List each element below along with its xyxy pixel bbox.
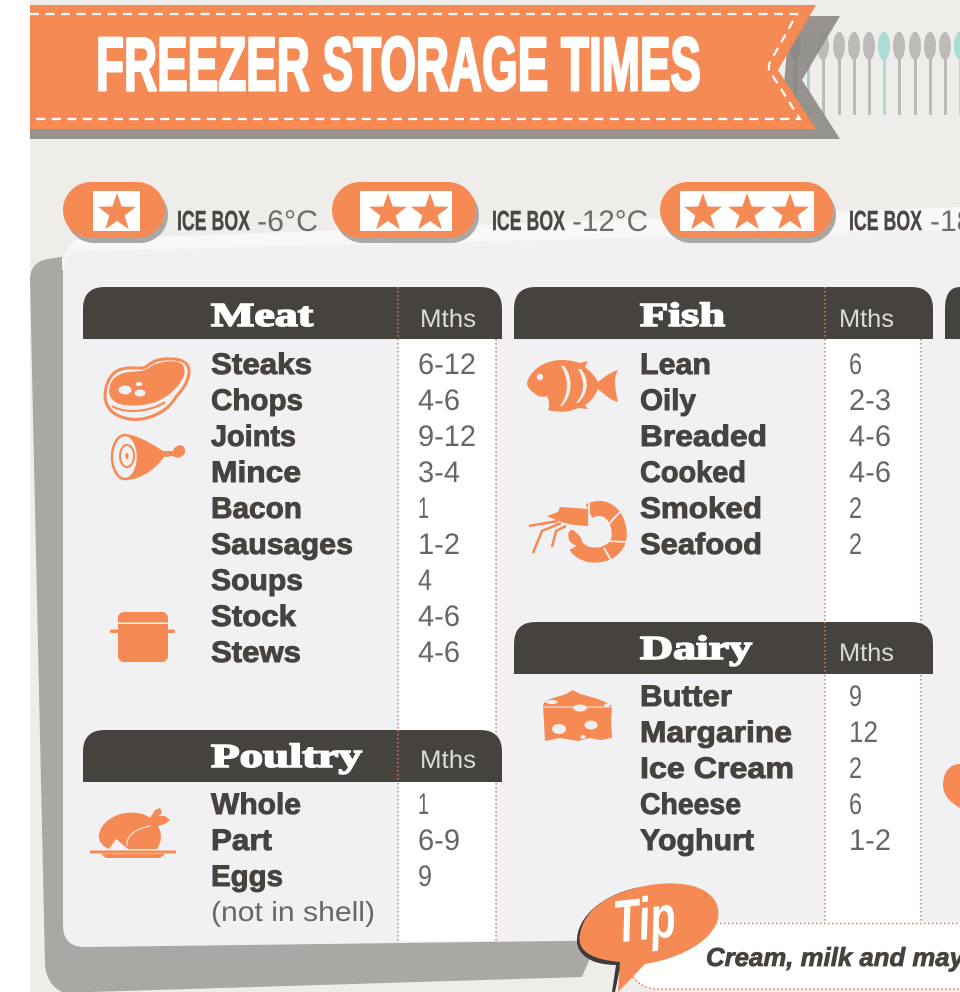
title banner (30, 5, 840, 139)
icon: pot (110, 612, 175, 662)
poultry header: Poultry (211, 738, 362, 775)
panel: meat (83, 287, 502, 669)
meat items: Stews (211, 636, 301, 669)
fish months: 2 (849, 492, 862, 525)
dairy header: Dairy (640, 630, 752, 667)
meat items: Steaks (211, 348, 312, 381)
dairy items: Margarine (640, 716, 792, 749)
fish months (849, 348, 891, 561)
poultry items: (not in shell) (211, 896, 375, 927)
poultry header: Mths (420, 746, 476, 774)
dairy months: 6 (849, 788, 862, 821)
panel: fish (514, 287, 933, 562)
poultry items: Part (211, 824, 272, 857)
panel: poultry (83, 730, 502, 927)
legend label: ICE BOX (492, 205, 565, 236)
fish header: Mths (839, 305, 894, 333)
icon: shrimp (529, 503, 628, 562)
fish items (640, 348, 767, 561)
tip text: Cream, milk and may (706, 942, 960, 972)
panel: fish and dairy month column (825, 339, 921, 924)
meat months: 4-6 (418, 384, 460, 417)
fish items: Smoked (640, 492, 762, 525)
dairy months: 1-2 (849, 824, 891, 857)
meat months: 6-12 (418, 348, 476, 381)
meat months: 1 (418, 492, 429, 525)
meat months: 4-6 (418, 600, 460, 633)
meat months: 1-2 (418, 528, 460, 561)
fish header: Fish (640, 297, 725, 334)
temperature: -12°C (572, 205, 648, 238)
fish items: Lean (640, 348, 711, 381)
meat items: Mince (211, 456, 301, 489)
meat months: 9-12 (418, 420, 476, 453)
poultry months: 1 (418, 788, 429, 821)
dairy items: Ice Cream (640, 752, 794, 785)
icon: fish (527, 360, 618, 412)
meat months: 4-6 (418, 636, 460, 669)
tip box (630, 923, 960, 989)
legend label: ICE BOX (177, 205, 250, 236)
meat items: Sausages (211, 528, 353, 561)
meat months: 4 (418, 564, 432, 597)
meat items: Joints (211, 420, 296, 453)
meat header: Mths (420, 305, 476, 333)
tip speech bubble (577, 882, 718, 992)
poultry items (211, 788, 375, 927)
poultry months (418, 788, 460, 893)
decorative spoons row (789, 32, 960, 115)
poultry items: Eggs (211, 860, 283, 893)
fish items: Oily (640, 384, 696, 417)
fish months: 4-6 (849, 420, 891, 453)
main panel (63, 230, 960, 947)
poultry items: Whole (211, 788, 301, 821)
icon: cheese (543, 690, 612, 741)
meat items (211, 348, 353, 669)
dairy items: Cheese (640, 788, 741, 821)
dairy header: Mths (839, 639, 894, 667)
poultry header (83, 730, 502, 782)
fish items: Breaded (640, 420, 767, 453)
fish months: 2-3 (849, 384, 891, 417)
fish items: Seafood (640, 528, 762, 561)
meat items: Stock (211, 600, 296, 633)
tip label: Tip (610, 882, 679, 956)
legend: one star (63, 182, 318, 243)
icon: ham (112, 434, 185, 480)
icon: roast chicken (90, 808, 176, 858)
meat items: Bacon (211, 492, 302, 525)
dairy items (640, 680, 794, 857)
meat items: Soups (211, 564, 303, 597)
fish months: 6 (849, 348, 862, 381)
temperature: -6°C (257, 205, 318, 238)
dairy months: 12 (849, 716, 878, 749)
dairy items: Yoghurt (640, 824, 754, 857)
meat items: Chops (211, 384, 303, 417)
next panel header, cropped at edge (945, 287, 960, 339)
legend: two stars (332, 182, 648, 243)
dairy header (514, 622, 933, 674)
panel: dairy (514, 622, 933, 857)
panel shadow (30, 254, 600, 992)
meat header: Meat (211, 297, 314, 334)
legend: three stars (660, 182, 960, 243)
fish items: Cooked (640, 456, 746, 489)
dairy months: 2 (849, 752, 862, 785)
icon: steak (105, 359, 189, 419)
white sliver behind panel (62, 207, 960, 270)
dairy months: 9 (849, 680, 862, 713)
panel: meat and poultry month column (398, 339, 496, 941)
meat months: 3-4 (418, 456, 460, 489)
meat months (418, 348, 476, 669)
meat header (83, 287, 502, 339)
dairy items: Butter (640, 680, 732, 713)
dairy months (849, 680, 891, 857)
poultry months: 6-9 (418, 824, 460, 857)
next panel icon, cropped at edge (943, 764, 960, 808)
fish months: 2 (849, 528, 862, 561)
fish months: 4-6 (849, 456, 891, 489)
fish header (514, 287, 933, 339)
poultry months: 9 (418, 860, 432, 893)
